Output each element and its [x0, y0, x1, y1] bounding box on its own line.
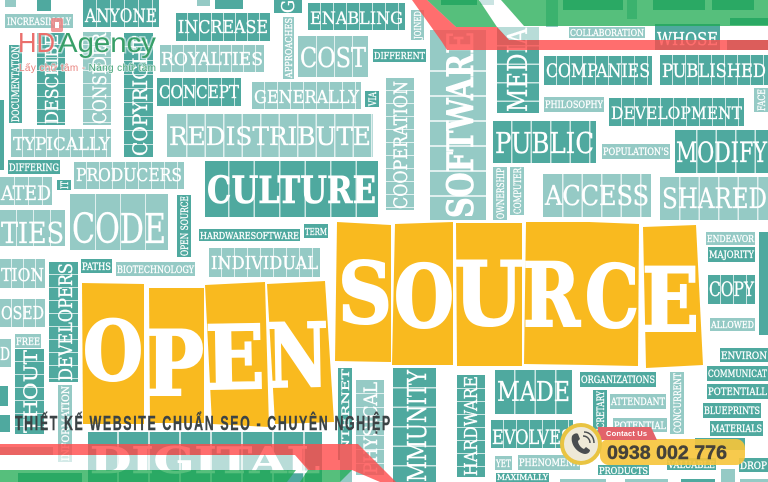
tile: PATHS: PATHS	[82, 262, 111, 273]
tile: PHILOSOPHY: PHILOSOPHY	[545, 100, 603, 111]
tile: OPEN SOURCE small	[177, 195, 191, 257]
tile: WITHOUT: THOUT	[20, 350, 42, 433]
word OPEN	[82, 281, 334, 427]
tile: CONCURRENT	[670, 372, 684, 434]
letter block O	[82, 283, 144, 424]
tile: INCREASINGLY	[5, 14, 73, 28]
tile: top fragments	[0, 0, 243, 170]
tile: DEVELOPMENT: DEVELOPMENT	[611, 104, 743, 124]
tile: PRODUCERS: PRODUCERS	[76, 165, 182, 186]
tile: bottom fragments	[560, 469, 768, 482]
tile: OPEN SOURCE small: OPEN SOURCE	[180, 196, 191, 256]
tile: FREE: FREE	[16, 337, 40, 348]
tile: CONCEPT	[157, 78, 241, 106]
tile: DEVELOPERS	[49, 262, 78, 382]
tile: SECRETARY: SECRETARY	[596, 391, 607, 439]
tile: CONSIDER: CONSIDER	[89, 32, 111, 124]
tile: COPY	[708, 275, 755, 304]
tile: ANYONE: ANYONE	[84, 5, 157, 27]
tile: COST: COST	[300, 43, 366, 74]
tile: INCREASE	[176, 13, 270, 41]
tile: INTERACTION	[18, 473, 82, 482]
tile: BIOTECHNOLOGY: BIOTECHNOLOGY	[117, 265, 194, 276]
letter block U	[454, 223, 523, 366]
tile: OSED	[0, 299, 45, 327]
tile: right edge strip	[759, 232, 768, 335]
tile: MAXIMALLY: MAXIMALLY	[497, 473, 549, 482]
tile: GENERALLY: GENERALLY	[254, 87, 360, 108]
tile: TION	[0, 259, 45, 288]
top-right ribbons	[412, 0, 768, 50]
tile: WITHOUT	[15, 349, 44, 434]
tile: OWNERSHIP	[493, 167, 507, 220]
tile: COMMUNITY: MMUNITY	[403, 369, 433, 482]
contact us tag	[598, 427, 657, 440]
tile: DESCRIBE: DESCRIBE	[42, 34, 63, 124]
tile: WHOSE: WHOSE	[657, 29, 718, 50]
tile: HARDWARE: HARDWARE	[461, 376, 482, 476]
tile: YET	[495, 456, 512, 470]
contact us tag: Contact Us	[606, 429, 647, 438]
tile: VIA: VIA	[368, 91, 379, 107]
tile: RATED: ATED	[0, 181, 51, 205]
tile: EVOLVES	[491, 420, 573, 449]
tile: INCREASINGLY: INCREASINGLY	[7, 17, 71, 28]
tile: DIFFERING: DIFFERING	[9, 163, 59, 174]
logo: HD Agency	[18, 18, 156, 74]
tile: POTENTIAL	[613, 418, 667, 432]
tile: D	[0, 339, 11, 367]
tile: FACE	[754, 88, 768, 112]
tile: WHOSE	[655, 24, 720, 50]
tile: EVOLVES: EVOLVES	[492, 425, 572, 449]
logo wordmark HD: HD	[18, 27, 55, 58]
phone pill	[600, 439, 745, 465]
tile: VALUABLE: VALUABLE	[667, 460, 715, 471]
tile: TERM: TERM	[305, 228, 327, 238]
tile: MEDIA	[497, 27, 539, 113]
tile: ORGANIZATIONS: ORGANIZATIONS	[581, 375, 655, 386]
tile: POPULATION'S: POPULATION'S	[603, 147, 669, 158]
tile: COOPERATION: COOPERATION	[390, 81, 412, 209]
contact badge	[562, 425, 745, 465]
tile: DEVELOPERS: DEVELOPERS	[55, 263, 77, 381]
tile: COMPANIES: COMPANIES	[546, 60, 650, 82]
tile: ENDEAVOR: ENDEAVOR	[707, 234, 755, 245]
letter block R: R	[523, 243, 581, 347]
tile: SECRETARY	[593, 390, 607, 440]
tile: PATHS	[81, 259, 112, 273]
tile: OPERATIONS	[0, 447, 53, 455]
green ribbon tiles	[441, 0, 768, 27]
tile: COLLABORATION: COLLABORATION	[570, 29, 644, 39]
letter block E: E	[205, 305, 265, 410]
letter block C	[585, 222, 639, 366]
tile: PREDICTS	[727, 40, 768, 50]
tile: PHENOMENA: PHENOMENA	[519, 458, 580, 469]
tile: CONCEPT: CONCEPT	[159, 82, 239, 103]
tile: YET: YET	[495, 459, 511, 470]
green ribbon	[427, 0, 768, 27]
tile: FACE: FACE	[757, 89, 768, 111]
letter block E: E	[642, 248, 699, 352]
letter block E	[642, 225, 703, 368]
tile: INDIVIDUAL: INDIVIDUAL	[211, 253, 318, 274]
letter block O	[392, 222, 454, 365]
word SOURCE	[335, 222, 703, 368]
tile: DEVELOPMENT	[609, 98, 744, 126]
tile: SOFTWARE	[430, 30, 486, 220]
tile: MEDIA: MEDIA	[503, 28, 534, 112]
letter block N: N	[266, 303, 329, 408]
tile: TYPICALLY: TYPICALLY	[13, 134, 111, 155]
tile: APPROACHES: APPROACHES	[285, 18, 295, 79]
tile: FREE	[15, 334, 41, 348]
tile: BIOTECHNOLOGY	[116, 262, 195, 276]
tile: DOCUMENTATION: DOCUMENTATION	[11, 46, 22, 122]
tile: PUBLIC: PUBLIC	[495, 126, 594, 160]
tile: DIGITAL	[88, 432, 322, 482]
logo wordmark Agency: Agency	[58, 27, 156, 58]
letter block C: C	[585, 247, 639, 348]
tile: TERM	[304, 224, 328, 238]
tile: TION: TION	[1, 265, 44, 286]
tile: ENABLING: ENABLING	[310, 9, 403, 29]
tile: HARDWARE	[457, 375, 485, 477]
tile: COMPANIES	[544, 56, 652, 85]
tile: D: D	[0, 344, 10, 365]
tile: PHYSICAL: PHYSICAL	[360, 382, 382, 474]
tile: COOPERATION	[386, 78, 414, 210]
tile: ACCESS: ACCESS	[544, 181, 649, 212]
letter block S	[335, 222, 392, 362]
tile: JOINED	[411, 10, 424, 40]
tile: OWNERSHIP: OWNERSHIP	[496, 168, 507, 219]
tile: BLUEPRINTS	[703, 403, 761, 418]
letter block R	[523, 222, 590, 365]
tile: COMPUTER: COMPUTER	[513, 168, 524, 214]
red ribbon	[0, 444, 396, 482]
tile: POTENTIAL: POTENTIAL	[614, 421, 666, 432]
tile: MATERIALS	[710, 421, 763, 436]
tile: MADE	[495, 370, 572, 414]
tile: ORGANIZATIONS	[580, 372, 656, 387]
tile: REDISTRIBUTE: REDISTRIBUTE	[169, 122, 371, 151]
tile: DIFFERING	[8, 160, 60, 174]
icon: phone in circle	[562, 425, 600, 463]
red ribbon	[412, 0, 768, 50]
tile: CULTURE: CULTURE	[207, 168, 376, 212]
letter block P: P	[146, 311, 204, 417]
tile: COPYRIGHT: COPYRIGHT	[128, 35, 152, 156]
tile: PHILOSOPHY	[544, 97, 604, 112]
tile: left edge fragments	[0, 386, 10, 432]
tile: INCREASE: INCREASE	[178, 17, 268, 38]
tile: DESCRIBE	[37, 33, 65, 125]
tile: REDISTRIBUTE	[167, 114, 373, 157]
tile: MAJORITY	[708, 247, 755, 262]
tile: DIFFERENT: DIFFERENT	[374, 51, 426, 62]
tile: POPULATION'S	[602, 144, 670, 159]
tile: VIA	[365, 91, 379, 107]
tile: PRODUCTS: PRODUCTS	[599, 466, 648, 477]
letter block O: O	[394, 247, 454, 348]
logo mark	[51, 18, 63, 32]
green ribbon	[0, 470, 352, 482]
phone number: 0938 002 776	[607, 443, 727, 464]
letter block E	[205, 282, 269, 427]
translucent white band	[0, 455, 310, 470]
tile: PRODUCERS	[74, 162, 184, 189]
tile: INDIVIDUAL	[209, 248, 320, 277]
tile: COPY: COPY	[709, 277, 755, 301]
tile: ATTENDANT	[610, 394, 666, 409]
tile: ACCESS	[543, 174, 651, 217]
heading: website tagline: THIẾT KẾ WEBSITE CHUẨN SEO - CHUYÊN NGHIỆP	[15, 412, 390, 435]
tile: COST	[298, 36, 368, 77]
tile: tile behind phone pill	[695, 438, 745, 450]
tile: CODE	[70, 194, 168, 253]
tile: CULTURE	[205, 161, 378, 217]
bottom-left ribbons	[0, 444, 396, 482]
letter block N	[266, 281, 334, 424]
tile: INTERNET	[338, 368, 352, 460]
tile: ROYALTIES: ROYALTIES	[161, 49, 263, 70]
letter block P	[146, 288, 204, 423]
tile: TIES: TIES	[1, 216, 64, 250]
tile: OSED: OSED	[1, 303, 44, 324]
logo slogan: Lấy chữ tâm - Nâng chữ tầm	[19, 62, 156, 74]
tile: ATTENDANT: ATTENDANT	[610, 397, 665, 408]
tile: ANSWER	[340, 445, 352, 482]
tile: IT: IT	[60, 181, 71, 189]
tile: DOCUMENTATION	[9, 45, 22, 123]
letter block S: S	[338, 244, 392, 343]
tile: DIGITAL: DIGITAL	[90, 440, 320, 482]
tile: COMMUNITY	[393, 368, 436, 482]
tile: INTERNET: INTERNET	[341, 368, 352, 459]
tile: CONCURRENT: CONCURRENT	[673, 373, 684, 433]
tile: MAJORITY: MAJORITY	[709, 250, 754, 261]
tile: CODE: CODE	[72, 205, 166, 253]
tile: CONSIDER	[83, 32, 111, 125]
letter block O: O	[83, 304, 143, 400]
tile: MADE: MADE	[497, 377, 570, 408]
tile: HARDWARESOFTWARE: HARDWARESOFTWARE	[200, 231, 299, 242]
tile: ANYONE	[83, 0, 159, 27]
tile: PHENOMENA	[518, 455, 580, 470]
tile: ALLOWED: ALLOWED	[710, 320, 754, 331]
tile: JOINED: JOINED	[414, 11, 424, 40]
tile: INFORMATION: INFORMATION	[61, 386, 72, 461]
translucent white band	[497, 27, 768, 40]
tile: COMPUTER	[510, 167, 524, 215]
tile: IT	[57, 180, 71, 190]
letter block U: U	[454, 242, 523, 346]
